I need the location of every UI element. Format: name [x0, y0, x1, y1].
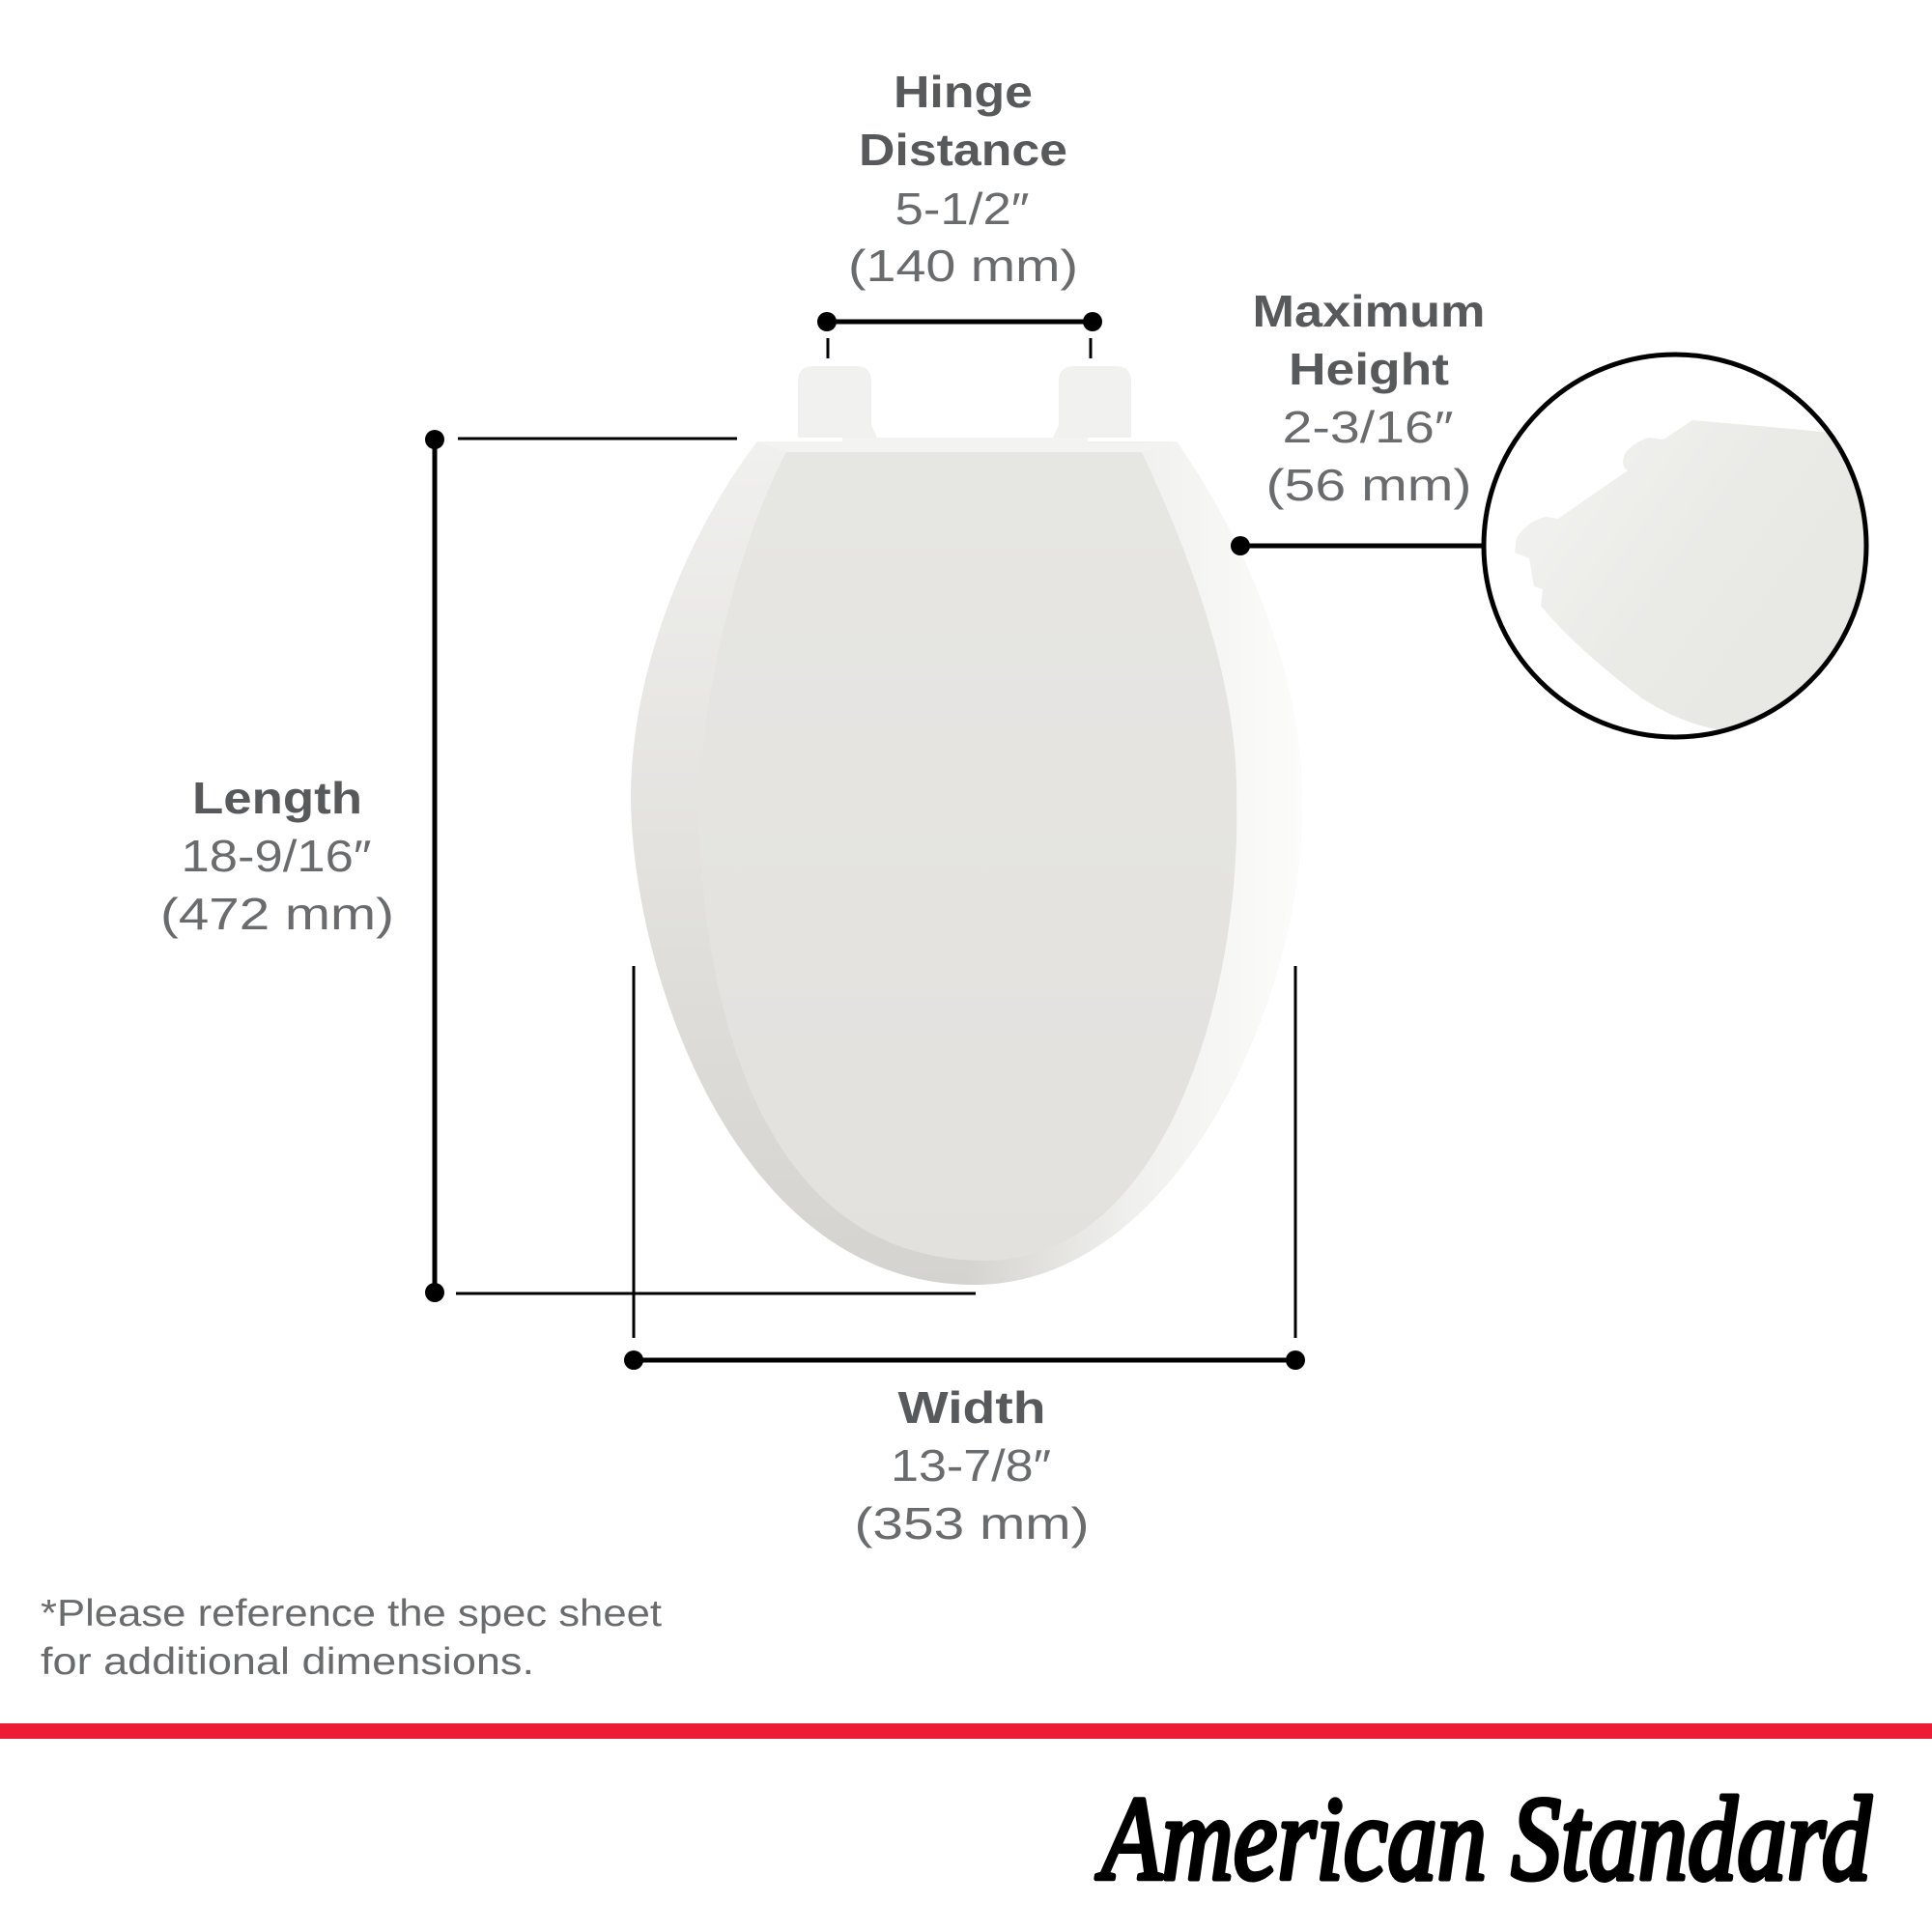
length arrow [425, 430, 976, 1302]
hinge: left [798, 366, 877, 438]
side view of seat [1515, 420, 1893, 732]
maximum height leader [1231, 536, 1484, 555]
length label: 18-9/16″ [182, 831, 371, 881]
hinge distance label: (140 mm) [848, 241, 1078, 291]
maximum height label [1252, 286, 1486, 510]
maximum height label: 2-3/16″ [1283, 402, 1453, 452]
hinge distance label: Hinge [894, 67, 1033, 117]
dimension: hinge distance [817, 67, 1102, 358]
width label: 13-7/8″ [891, 1440, 1051, 1491]
length label [160, 773, 394, 939]
red divider band [0, 1723, 1932, 1739]
toilet seat illustration [618, 366, 1314, 1294]
hinge distance label [848, 67, 1078, 291]
width label: Width [898, 1382, 1045, 1433]
dimension: maximum height [1231, 286, 1893, 738]
hinge: right [1053, 366, 1131, 438]
footnote: for additional dimensions. [41, 1641, 534, 1683]
maximum height label: Maximum [1252, 286, 1486, 336]
footnote [41, 1593, 662, 1683]
dimension: width [624, 966, 1305, 1548]
width label [854, 1382, 1090, 1548]
length label: (472 mm) [160, 889, 394, 939]
width label: (353 mm) [854, 1498, 1090, 1548]
seat lid outer bevel [618, 435, 1314, 1294]
seat lid inner panel [699, 452, 1236, 1261]
footnote: *Please reference the spec sheet [41, 1593, 662, 1634]
seat top edge [757, 438, 1177, 452]
side view inset circle [1483, 354, 1893, 738]
length label: Length [192, 773, 362, 823]
maximum height label: Height [1289, 344, 1449, 394]
hinge distance label: Distance [859, 125, 1067, 175]
hinge distance arrow [817, 312, 1102, 358]
hinge distance label: 5-1/2″ [895, 184, 1030, 234]
width arrow [624, 966, 1305, 1370]
maximum height label: (56 mm) [1265, 460, 1472, 510]
dimension: length [160, 430, 976, 1302]
